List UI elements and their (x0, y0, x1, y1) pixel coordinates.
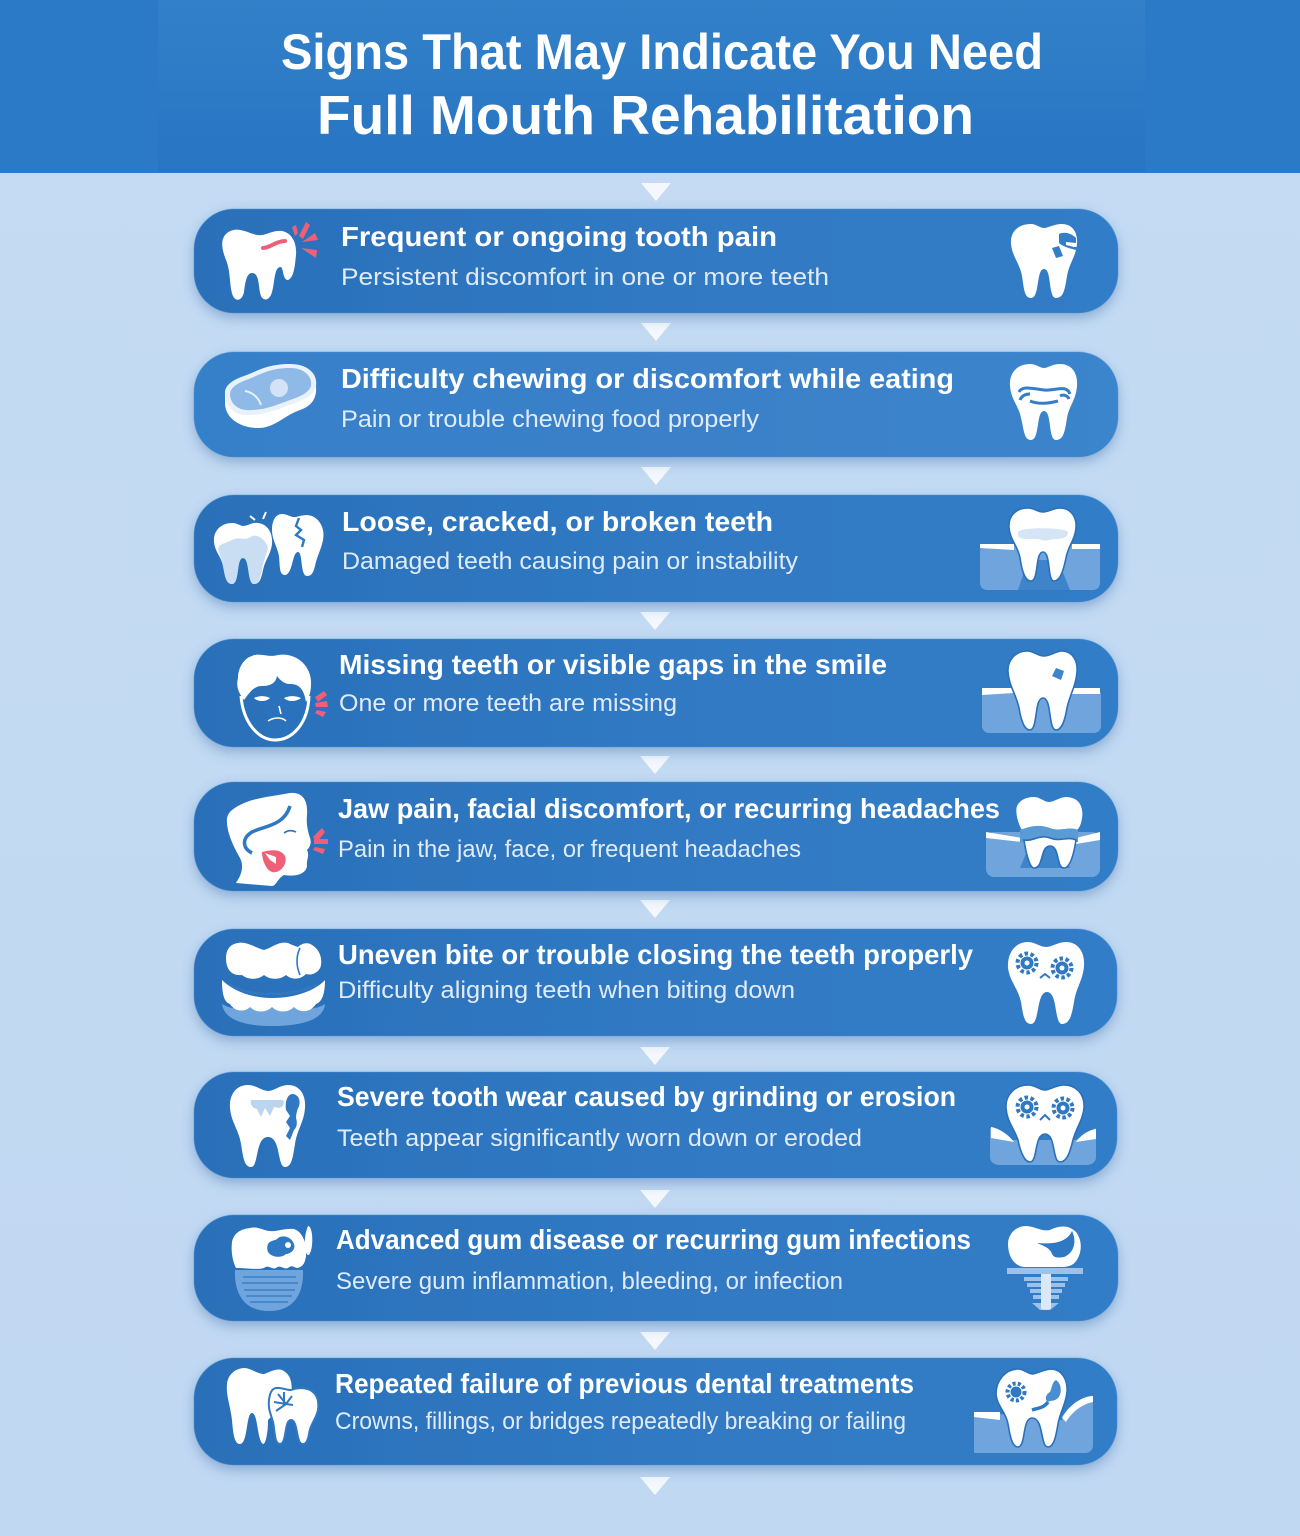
panel: repeated failure (194, 1358, 1117, 1465)
description: Damaged teeth causing pain or instability (342, 548, 799, 575)
panel: jaw pain (194, 782, 1118, 891)
title: Full Mouth Rehabilitation (317, 84, 974, 146)
gears (1018, 1098, 1072, 1120)
pill (194, 639, 1118, 747)
panel: frequent tooth pain (194, 209, 1118, 313)
arrow 2 (641, 323, 671, 341)
panel: difficulty chewing (194, 352, 1118, 457)
description: Teeth appear significantly worn down or eroded (337, 1125, 862, 1152)
arrow 6 (640, 900, 670, 918)
heading: Frequent or ongoing tooth pain (341, 221, 777, 252)
arrow 1 (641, 183, 671, 201)
pill (194, 209, 1118, 313)
gears (1018, 954, 1072, 978)
panel: loose cracked teeth (194, 495, 1118, 602)
heading: Advanced gum disease or recurring gum infections (336, 1224, 971, 1255)
icon: sad face (237, 655, 328, 740)
description: Pain in the jaw, face, or frequent headaches (338, 836, 801, 863)
panel: severe tooth wear (194, 1072, 1117, 1178)
icon: infected tooth and gum (232, 1226, 312, 1311)
arrow 3 (641, 467, 671, 485)
arrow 5 (640, 756, 670, 774)
panel: uneven bite (194, 929, 1117, 1036)
icon: failed tooth in gum (974, 1369, 1093, 1453)
heading: Loose, cracked, or broken teeth (342, 506, 773, 537)
icon: tooth with gum recession (986, 797, 1100, 877)
arrow 10 (640, 1477, 670, 1495)
heading: Repeated failure of previous dental treatments (335, 1368, 914, 1399)
icon: tooth in gum (980, 508, 1100, 590)
icon: dentures (222, 943, 325, 1026)
pill (194, 782, 1118, 891)
pill (194, 352, 1118, 457)
heading: Jaw pain, facial discomfort, or recurring headaches (338, 793, 1000, 824)
icon: aching tooth (222, 222, 318, 300)
title: Signs That May Indicate You Need (281, 24, 1043, 80)
heading: Uneven bite or trouble closing the teeth properly (338, 939, 973, 970)
pill (194, 1215, 1118, 1321)
icon: broken teeth pair (227, 1368, 318, 1444)
arrow 4 (640, 612, 670, 630)
heading: Missing teeth or visible gaps in the smile (339, 649, 887, 680)
description: One or more teeth are missing (339, 690, 677, 717)
pill (194, 495, 1118, 602)
icon: steak (225, 364, 316, 428)
heading: Difficulty chewing or discomfort while eating (341, 363, 954, 394)
pill (194, 1072, 1117, 1178)
arrow 7 (640, 1047, 670, 1065)
description: Crowns, fillings, or bridges repeatedly breaking or failing (335, 1408, 906, 1435)
title (281, 24, 1043, 146)
header banner (0, 0, 1300, 173)
icon: cracked teeth (214, 512, 324, 584)
panel: gum disease (194, 1215, 1118, 1321)
description: Pain or trouble chewing food properly (341, 406, 760, 433)
icon: tooth with gears (1008, 942, 1084, 1024)
icon: head profile with jaw pain (227, 793, 328, 886)
description: Difficulty aligning teeth when biting down (338, 977, 795, 1004)
icon: tooth with gears in gum (990, 1085, 1096, 1165)
icon: chipped tooth (1011, 224, 1078, 298)
panel: missing teeth (194, 639, 1118, 747)
icon: tooth with chip (982, 651, 1101, 733)
icon: dental implant (1007, 1226, 1083, 1310)
heading: Severe tooth wear caused by grinding or erosion (337, 1081, 956, 1112)
arrow 8 (640, 1190, 670, 1208)
description: Severe gum inflammation, bleeding, or infection (336, 1268, 843, 1295)
pill (194, 929, 1117, 1036)
icon: eroded tooth (230, 1085, 305, 1167)
icon: worn tooth (1010, 364, 1077, 440)
description: Persistent discomfort in one or more teeth (341, 264, 829, 291)
arrow 9 (640, 1332, 670, 1350)
pill (194, 1358, 1117, 1465)
